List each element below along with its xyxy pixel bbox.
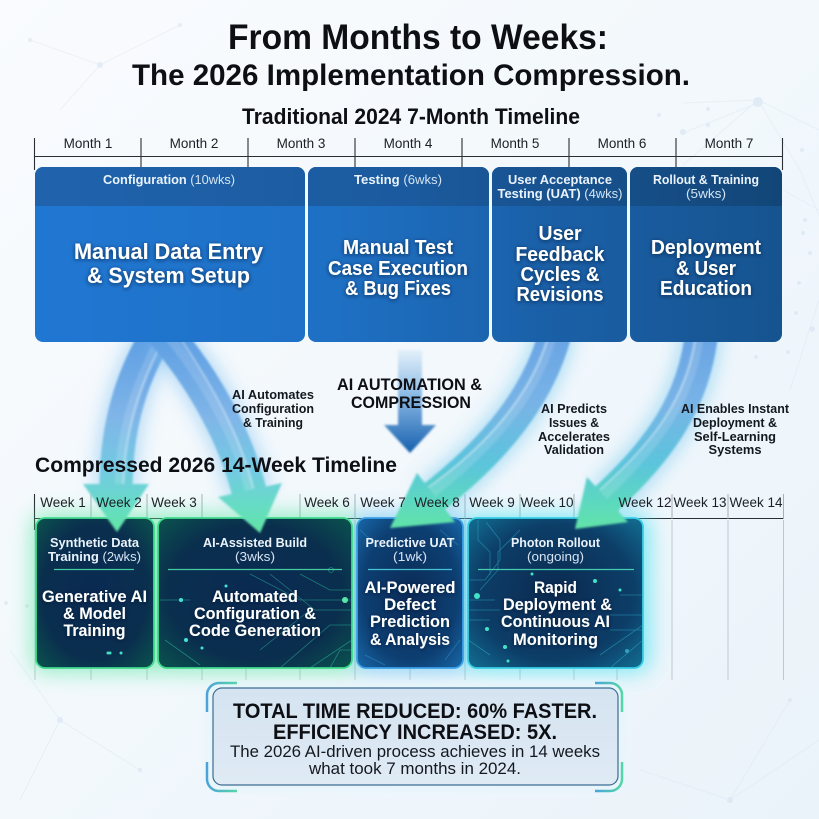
label: AI enables instant deployment: Self-Learning bbox=[694, 430, 776, 444]
callout: results summary: TOTAL TIME REDUCED: 60% FASTER. bbox=[233, 700, 597, 723]
arrow: rollout to photon rollout bbox=[575, 330, 702, 529]
week labels: Week 2 bbox=[96, 495, 142, 510]
label: AI enables instant deployment bbox=[681, 402, 790, 457]
week labels: Week 14 bbox=[729, 495, 783, 510]
callout: results summary bbox=[205, 682, 625, 792]
panel: photon rollout: Photon Rollout bbox=[511, 536, 601, 550]
panel: photon rollout: (ongoing) bbox=[527, 550, 584, 564]
compressed panel glows bbox=[32, 514, 650, 672]
panel: synthetic data training: Generative AI bbox=[42, 587, 147, 606]
label: AI predicts issues: Accelerates bbox=[538, 430, 610, 444]
panel: photon rollout bbox=[468, 518, 643, 668]
label: AI automates configuration bbox=[232, 388, 314, 430]
panel: user acceptance testing: Cycles & bbox=[520, 264, 600, 286]
panel: configuration: Manual Data Entry bbox=[74, 239, 264, 264]
panel: synthetic data training: Training (2wks) bbox=[48, 550, 141, 564]
panel: rollout and training bbox=[630, 167, 782, 342]
panel: user acceptance testing: Testing (UAT) (4wks) bbox=[498, 187, 622, 201]
week axis bbox=[34, 494, 784, 680]
label: AI automation and compression: AI AUTOMATION & bbox=[337, 376, 482, 394]
heading: traditional timeline: Traditional 2024 7-Month Timeline bbox=[242, 104, 580, 129]
label: AI automation and compression bbox=[337, 376, 482, 412]
panel: rollout and training: Deployment bbox=[651, 237, 761, 259]
month axis: Month 1 bbox=[64, 136, 112, 151]
month axis: Month 7 bbox=[705, 136, 753, 151]
title: From Months to Weeks: bbox=[228, 18, 608, 57]
panel: testing bbox=[308, 167, 489, 342]
panel: synthetic data training bbox=[36, 518, 154, 668]
panel: rollout and training: Rollout & Training bbox=[653, 173, 759, 187]
panel: predictive UAT: Prediction bbox=[370, 612, 450, 631]
panel: testing: & Bug Fixes bbox=[345, 278, 451, 300]
title bbox=[132, 18, 690, 92]
panel: configuration: Configuration (10wks) bbox=[103, 173, 235, 187]
panel: synthetic data training: & Model bbox=[63, 604, 126, 623]
label: AI enables instant deployment: Systems bbox=[708, 443, 762, 457]
panel: predictive UAT: & Analysis bbox=[370, 630, 450, 649]
panel: rollout and training: & User bbox=[676, 258, 736, 280]
panel: AI-assisted build: Code Generation bbox=[189, 621, 321, 640]
week labels: Week 8 bbox=[414, 495, 460, 510]
label: AI automates configuration: & Training bbox=[243, 416, 303, 430]
panel: predictive UAT: Predictive UAT bbox=[366, 536, 455, 550]
panel: testing: Manual Test bbox=[343, 237, 453, 259]
month axis: Month 6 bbox=[598, 136, 646, 151]
heading: compressed timeline: Compressed 2026 14-Week Timeline bbox=[35, 454, 397, 477]
panel: user acceptance testing bbox=[492, 167, 627, 342]
callout: results summary: what took 7 months in 2024. bbox=[308, 759, 521, 778]
panel: photon rollout: Continuous AI bbox=[501, 612, 610, 631]
callout: results summary: The 2026 AI-driven process achieves in 14 weeks bbox=[230, 742, 600, 761]
panel: user acceptance testing: User bbox=[538, 223, 582, 245]
label: AI automates configuration: AI Automates bbox=[232, 388, 314, 402]
panel: predictive UAT: AI-Powered bbox=[364, 578, 456, 597]
title: The 2026 Implementation Compression. bbox=[132, 59, 690, 92]
arrow: UAT to predictive UAT bbox=[390, 330, 556, 528]
panel: rollout and training: Education bbox=[660, 278, 752, 300]
panel: testing: Case Execution bbox=[328, 258, 468, 280]
panel: synthetic data training: Training bbox=[64, 621, 126, 640]
panel: predictive UAT: (1wk) bbox=[393, 550, 427, 564]
panel: photon rollout: Rapid bbox=[534, 578, 577, 597]
callout: results summary: EFFICIENCY INCREASED: 5X. bbox=[273, 721, 557, 744]
panel: user acceptance testing: Revisions bbox=[516, 284, 604, 306]
label: AI enables instant deployment: Deployment & bbox=[693, 416, 777, 430]
panel: user acceptance testing: Feedback bbox=[516, 244, 605, 266]
panel: AI-assisted build: Automated bbox=[212, 587, 298, 606]
week labels: Week 9 bbox=[469, 495, 515, 510]
panel: predictive UAT bbox=[357, 518, 463, 668]
week labels: Week 7 bbox=[360, 495, 406, 510]
panel: configuration bbox=[35, 167, 305, 342]
panel: synthetic data training: Synthetic Data bbox=[50, 536, 140, 550]
panel: configuration: & System Setup bbox=[87, 263, 250, 288]
month axis: Month 4 bbox=[384, 136, 433, 151]
week labels: Week 6 bbox=[304, 495, 350, 510]
arrow: configuration to AI-assisted build bbox=[163, 332, 282, 533]
panel: photon rollout: Monitoring bbox=[513, 630, 598, 649]
panel: predictive UAT: Defect bbox=[384, 595, 436, 614]
week labels: Week 10 bbox=[520, 495, 574, 510]
label: AI predicts issues: Issues & bbox=[549, 416, 599, 430]
week labels bbox=[40, 495, 783, 510]
panel: rollout and training: (5wks) bbox=[686, 187, 726, 201]
panel: AI-assisted build: Configuration & bbox=[194, 604, 316, 623]
panel: AI-assisted build bbox=[158, 518, 352, 668]
week labels: Week 13 bbox=[673, 495, 727, 510]
month axis: Month 5 bbox=[491, 136, 539, 151]
label: AI predicts issues: Validation bbox=[544, 443, 604, 457]
label: AI automation and compression: COMPRESSION bbox=[351, 394, 471, 412]
panel: user acceptance testing: User Acceptance bbox=[508, 173, 612, 187]
week labels: Week 1 bbox=[40, 495, 86, 510]
label: AI automates configuration: Configuration bbox=[232, 402, 314, 416]
label: AI predicts issues bbox=[538, 402, 610, 457]
panel: testing: Testing (6wks) bbox=[354, 173, 442, 187]
panel: AI-assisted build: AI-Assisted Build bbox=[203, 536, 307, 550]
panel: photon rollout: Deployment & bbox=[503, 595, 612, 614]
label: AI predicts issues: AI Predicts bbox=[541, 402, 607, 416]
month axis: Month 3 bbox=[277, 136, 325, 151]
label: AI enables instant deployment: AI Enables Instant bbox=[681, 402, 790, 416]
arrow: configuration to synthetic data training bbox=[83, 330, 166, 532]
week labels: Week 3 bbox=[151, 495, 197, 510]
arrow: central AI compression bbox=[384, 350, 436, 453]
month axis: Month 2 bbox=[170, 136, 218, 151]
week labels: Week 12 bbox=[618, 495, 672, 510]
panel: AI-assisted build: (3wks) bbox=[235, 550, 275, 564]
month axis bbox=[34, 136, 782, 170]
